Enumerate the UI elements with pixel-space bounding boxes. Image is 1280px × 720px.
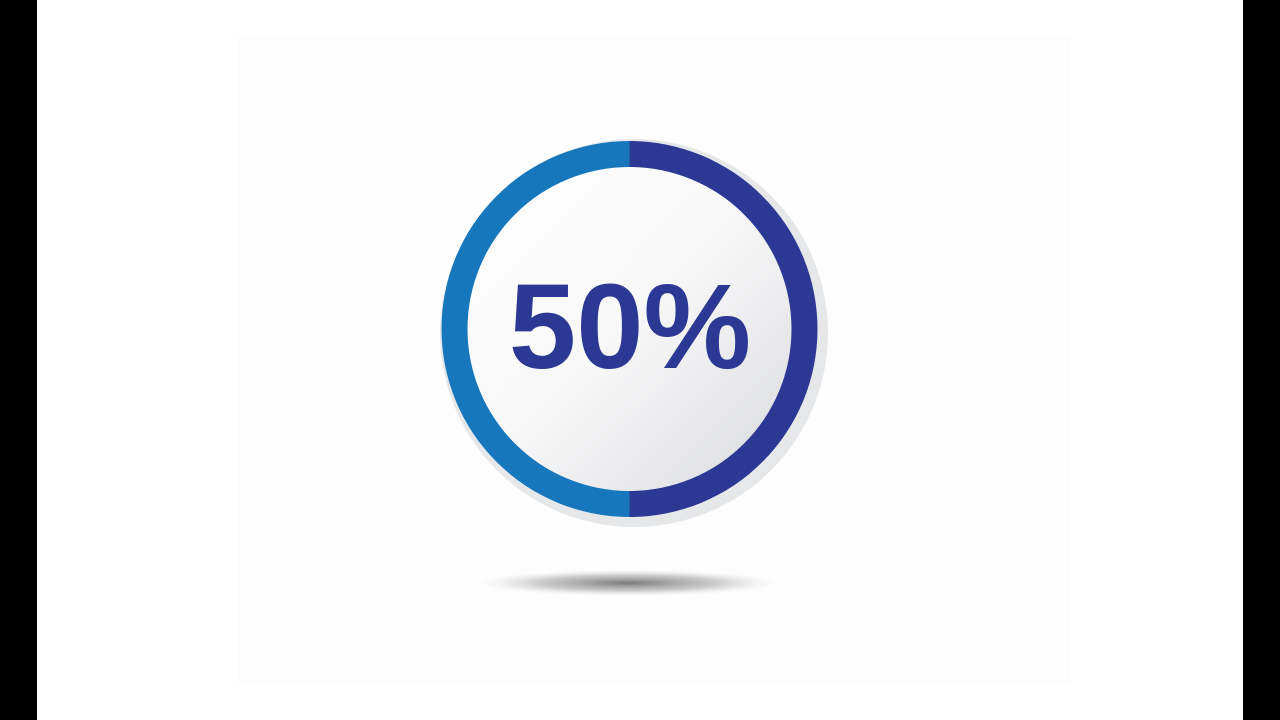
background panel [238,35,1070,685]
percentage badge [440,139,828,527]
floor shadow [480,570,776,596]
label: 50%: 50% [509,258,751,394]
